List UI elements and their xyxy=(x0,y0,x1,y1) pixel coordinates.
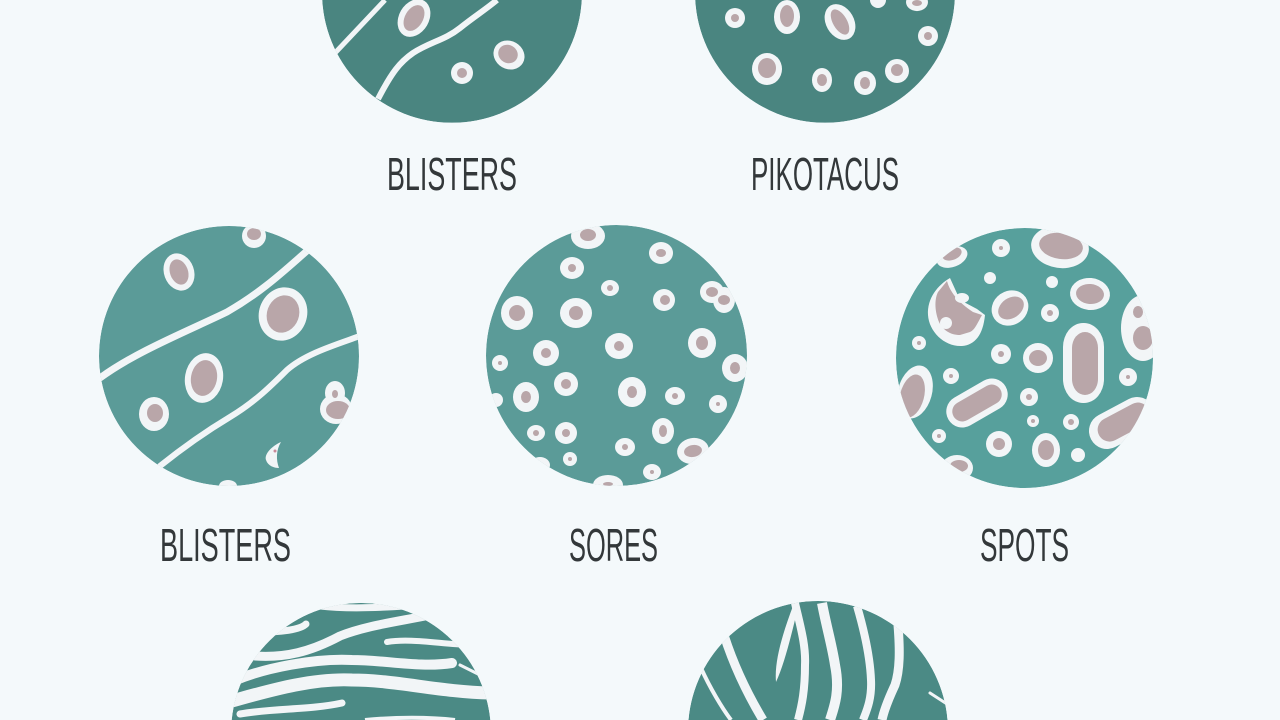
label: pikotacus: PIKOTACUS xyxy=(751,148,899,200)
icon: skin with scattered spots xyxy=(695,0,955,123)
panel: pikotacus xyxy=(695,0,955,200)
label: sores: SORES xyxy=(569,519,658,571)
panel: blisters xyxy=(99,224,360,571)
panel: horizontal streaks xyxy=(228,603,490,720)
icon: skin with many sores xyxy=(486,223,748,495)
panel: spots xyxy=(896,228,1153,562)
label: spots: SPOTS xyxy=(980,519,1069,571)
panel: blisters top xyxy=(322,0,582,200)
panel: vertical streaks xyxy=(688,601,948,720)
icon: skin with irregular spots xyxy=(892,222,1165,488)
label: blisters: BLISTERS xyxy=(387,148,517,200)
panel: sores xyxy=(486,223,748,571)
label: blisters: BLISTERS xyxy=(160,519,291,571)
irregular lesion xyxy=(928,278,985,346)
icon: skin with large blisters and creases xyxy=(99,224,360,492)
icon: skin with blisters and creases xyxy=(322,0,582,123)
